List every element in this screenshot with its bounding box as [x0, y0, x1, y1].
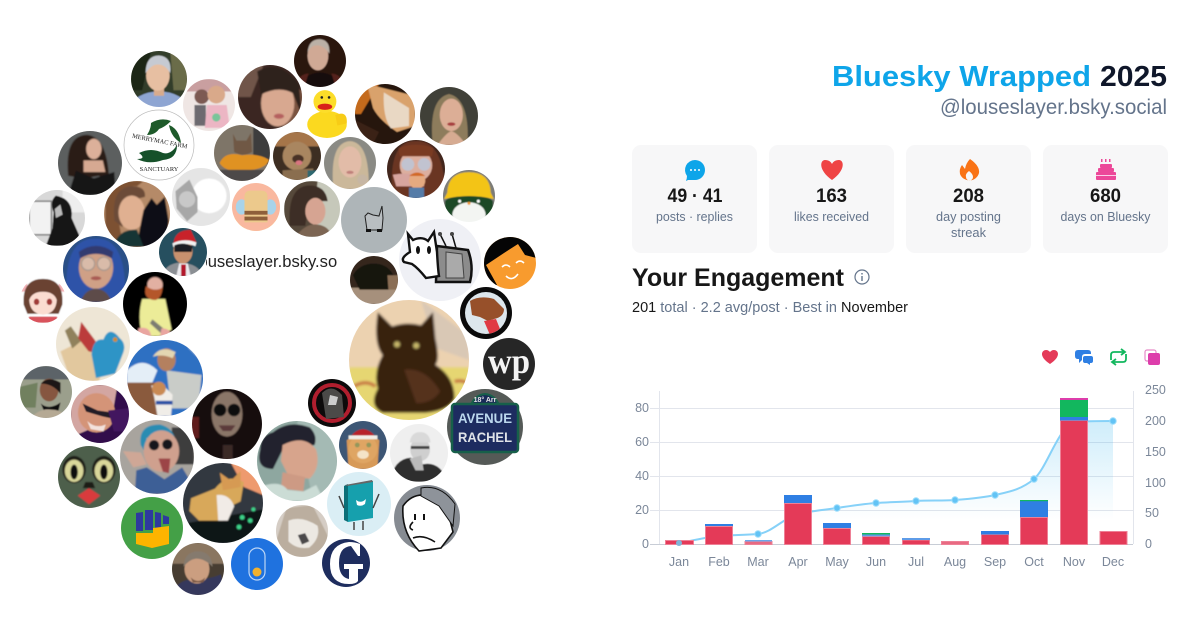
right axis labels: 150 [1145, 445, 1166, 459]
left axis labels: 60 [635, 435, 649, 449]
right axis labels: 0 [1145, 537, 1152, 551]
panel: day posting streak: day posting [936, 210, 1001, 224]
avatar: cat with TV [399, 219, 481, 301]
title: Bluesky Wrapped [832, 61, 1091, 93]
month labels: Feb [708, 555, 730, 569]
month labels: Oct [1024, 555, 1044, 569]
left axis labels: 20 [635, 503, 649, 517]
avatar: Santa hat man [159, 228, 207, 276]
avatar: Santa engraving [172, 168, 230, 226]
avatar: big brown kitten painting [349, 300, 469, 420]
month labels: Nov [1063, 555, 1086, 569]
avatar: dog in black ring [460, 287, 512, 339]
panel: likes received: likes received [794, 210, 869, 224]
avatar: cartoon face [394, 485, 460, 551]
panel: posts and replies [632, 145, 757, 253]
avatar: older man in checked shirt [131, 51, 187, 107]
avatar: grey fluffy cat [276, 505, 328, 557]
avatar: cat with hard hat [443, 170, 495, 222]
avatar: blonde woman [324, 137, 376, 189]
avatar: painted portrait of woman [257, 421, 337, 501]
avatar: medieval manuscript beasts [56, 307, 130, 381]
panel: day posting streak: streak [951, 226, 987, 240]
avatar: Merrymac Farm Sanctuary logo [124, 110, 194, 180]
avatar: Avenue Rachel street sign: 18° Arr [474, 396, 497, 404]
panel: day posting streak: 208 [953, 186, 984, 207]
panel: days on Bluesky [1043, 145, 1168, 253]
avatar: orange cat close-up [355, 84, 415, 144]
handle: @louseslayer.bsky.social [940, 96, 1167, 119]
avatar: Merrymac Farm Sanctuary logo: MERRYMAC FARM [131, 133, 188, 150]
avatar: green creature with big eyes [58, 446, 120, 508]
avatar: woman with glasses and doll [387, 140, 445, 198]
icon: chat bubble [685, 160, 705, 181]
gridlines [650, 391, 1134, 544]
avatar: smiling man with glasses [71, 385, 129, 443]
avatar: toast with wings [232, 183, 280, 231]
left axis labels: 40 [635, 469, 649, 483]
icon: heart [821, 160, 843, 180]
avatar: skull makeup woman [192, 389, 262, 459]
avatar: Washington Post logo [483, 338, 535, 390]
avatar: Guardian G logo [322, 539, 370, 587]
title: 2025 [1100, 61, 1167, 93]
month labels: Sep [984, 555, 1006, 569]
stacked bars [666, 398, 1127, 544]
cumulative area and line [679, 418, 1116, 544]
avatar: woman with long hair [238, 65, 302, 129]
icon: reposts [1111, 349, 1126, 365]
icon: quotes [1145, 350, 1160, 365]
avatar: woman with curly hair [284, 181, 340, 237]
icon: cake [1096, 159, 1116, 180]
engagement summary: 201 total · 2.2 avg/post · Best in November [632, 300, 908, 316]
avatar: man with dog on bench [127, 340, 203, 416]
icon: replies [1075, 350, 1093, 365]
avatar: curly-haired dog [273, 132, 321, 180]
avatar cloud [15, 30, 540, 600]
avatar: anime pair [183, 79, 235, 131]
avatar: rubber duck [307, 90, 347, 138]
left axis labels [635, 401, 649, 551]
avatar: kitten on keyboard [183, 463, 263, 543]
avatar: dark cat [350, 256, 398, 304]
month labels: Jan [669, 555, 689, 569]
right axis labels: 200 [1145, 414, 1166, 428]
avatar: bald bearded figure on black [123, 272, 187, 336]
avatar: Washington Post logo: wp [488, 341, 530, 381]
chart: monthly engagement [635, 383, 1166, 569]
right axis labels: 100 [1145, 476, 1166, 490]
avatar: cat on orange pillow [214, 125, 270, 181]
center handle text: @louseslayer.bsky.social [178, 253, 362, 271]
avatar: grey with small cat doodle [341, 187, 407, 253]
avatar: black and white woman [29, 190, 85, 246]
avatar: man with blue hair and sunglasses [120, 420, 194, 494]
month labels [669, 555, 1124, 569]
right axis labels [1145, 383, 1166, 551]
left axis labels: 0 [642, 537, 649, 551]
avatar: man with beard [172, 543, 224, 595]
icon: likes heart [1042, 350, 1058, 364]
month labels: Jul [908, 555, 924, 569]
month labels: Dec [1102, 555, 1124, 569]
month labels: Jun [866, 555, 886, 569]
right axis labels: 250 [1145, 383, 1166, 397]
month labels: Mar [747, 555, 769, 569]
avatar: woman with black cat [104, 181, 170, 247]
panel: day posting streak [906, 145, 1031, 253]
panel: likes received: 163 [816, 186, 847, 207]
panel: posts and replies: posts · replies [656, 210, 733, 224]
left axis labels: 80 [635, 401, 649, 415]
avatar: Merrymac Farm Sanctuary logo: SANCTUARY [140, 166, 179, 173]
avatar: old man on dark background [294, 35, 346, 87]
month labels: Aug [944, 555, 966, 569]
avatar: orange cat logo [484, 237, 536, 289]
panel: posts and replies: 49 · 41 [668, 186, 723, 207]
avatar: man with headphones [20, 366, 72, 418]
avatar: blue-haired woman with glasses [63, 236, 129, 302]
legend icons [1042, 349, 1160, 365]
avatar: Christmas cat [339, 421, 387, 469]
avatar: reaper logo [308, 379, 356, 427]
avatar: Avenue Rachel street sign: RACHEL [458, 429, 512, 445]
avatar: young woman [420, 87, 478, 145]
avatar: green fist logo [121, 497, 183, 559]
heading: your engagement: Your Engagement [632, 264, 845, 292]
avatar: woman in black dress [58, 131, 122, 195]
panel: days on Bluesky: days on Bluesky [1060, 210, 1151, 224]
avatar: Avenue Rachel street sign: AVENUE [458, 410, 512, 426]
month labels: May [825, 555, 850, 569]
avatar: smiling teal book [327, 472, 391, 536]
avatar: anime girl with brown hair [22, 278, 64, 323]
panel: days on Bluesky: 680 [1090, 186, 1121, 207]
icon: flame [960, 159, 979, 180]
avatar: black and white man with hat [390, 424, 448, 482]
avatar: blue toggle [231, 538, 283, 590]
right axis labels: 50 [1145, 506, 1159, 520]
icon: info [855, 270, 869, 284]
panel: likes received [769, 145, 894, 253]
avatar: Avenue Rachel street sign [447, 389, 523, 465]
month labels: Apr [788, 555, 808, 569]
